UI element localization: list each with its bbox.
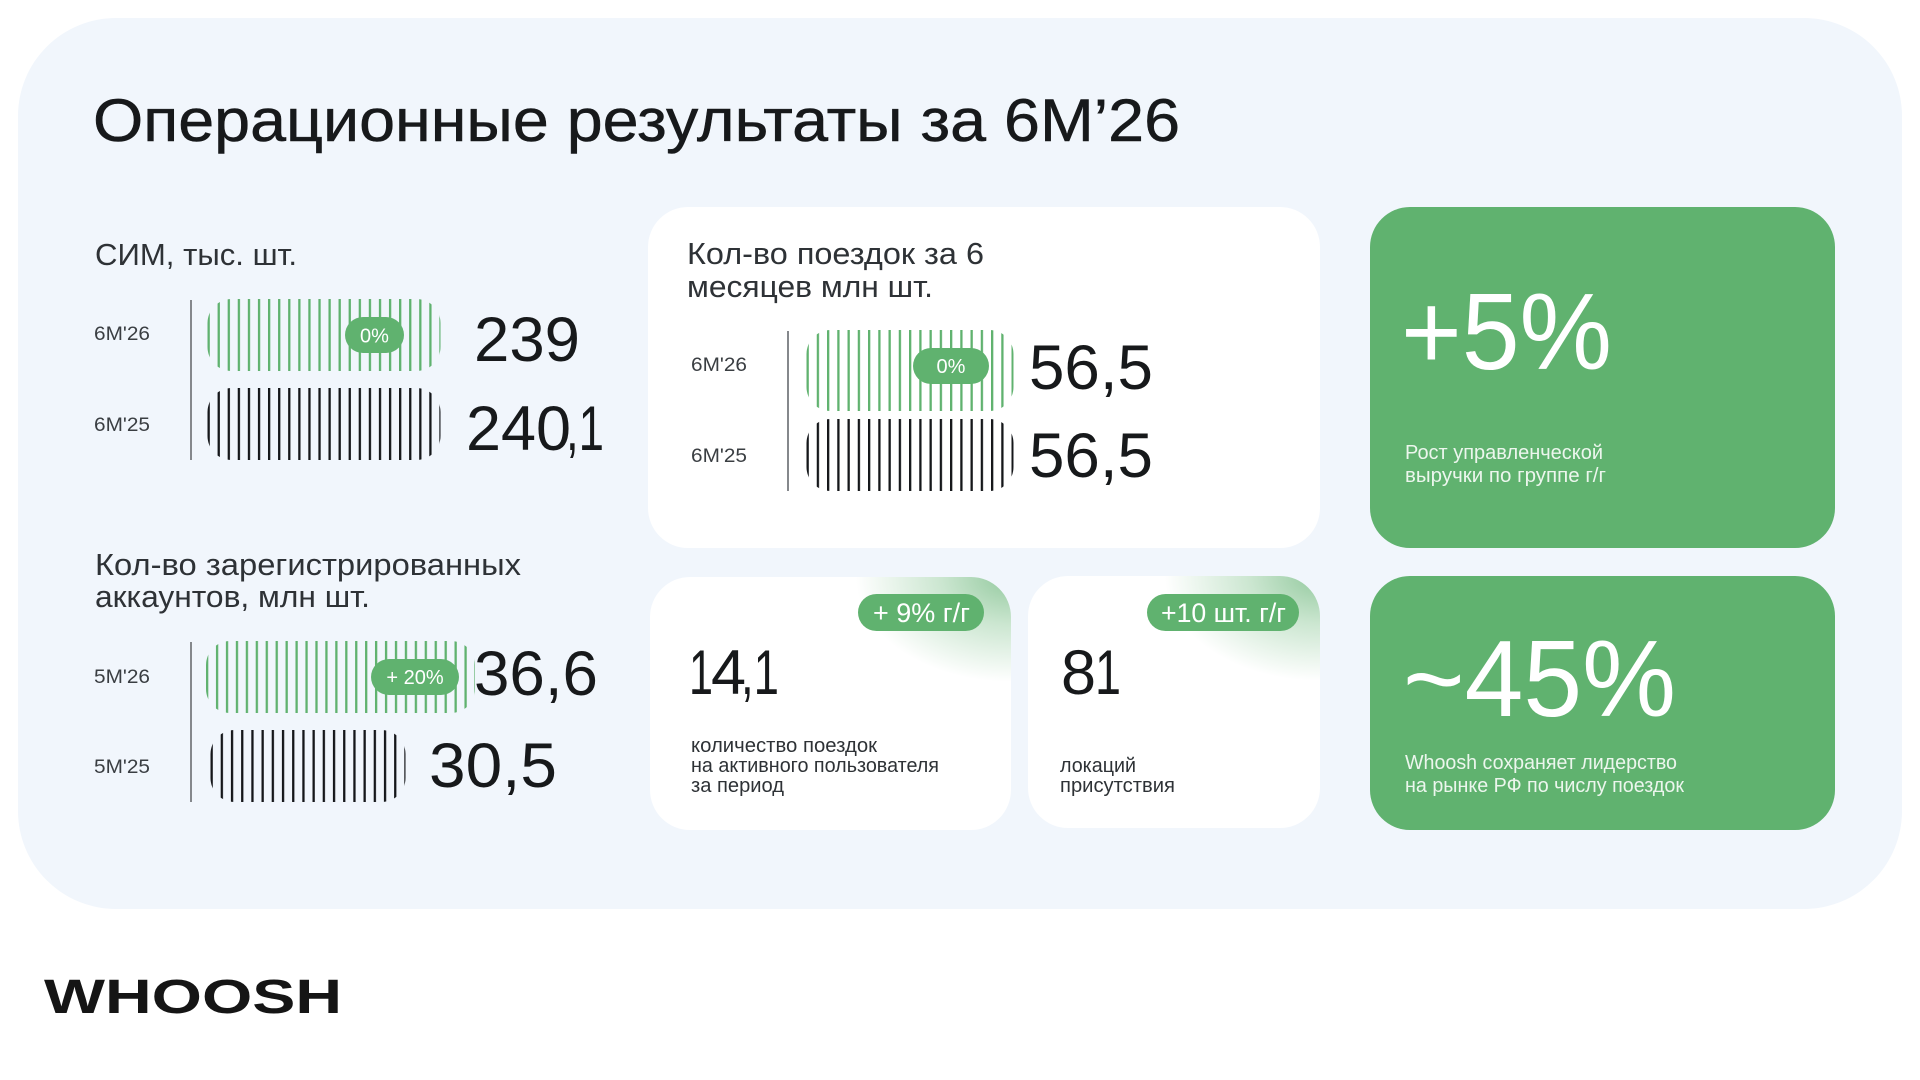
title: Операционные результаты за 6М’26 [93, 87, 1180, 154]
label: 5M'26: 5М'26 [94, 667, 150, 688]
card background [1370, 576, 1835, 830]
label: 6M'25: 6М'25 [691, 446, 747, 467]
value: 56,5 previous: 56,5 [1029, 421, 1153, 491]
badge: +10 units y/y [1147, 594, 1299, 631]
description [1060, 755, 1175, 797]
value: 14,1: 1 [689, 638, 713, 708]
value: 14,1: 4 [711, 638, 746, 708]
panel: SIM fleet [94, 237, 604, 464]
badge: 0% [345, 317, 404, 353]
badge: +9% y/y [858, 594, 984, 631]
logo: WHOOSH: WHOOSH [44, 971, 342, 1024]
description: выручки по группе г/г [1405, 465, 1606, 487]
card background [1028, 576, 1320, 828]
card background [1370, 207, 1835, 548]
panel: locations [1028, 576, 1320, 828]
value: 240,1: ,1 [566, 394, 604, 464]
label: 5M'25: 5М'25 [94, 757, 150, 778]
value: 14,1 [689, 638, 779, 708]
heading: registered accounts: Кол-во зарегистрированных [95, 547, 522, 582]
value: 240,1: 240 [466, 394, 571, 464]
bar: 6M'26 green [806, 330, 1014, 411]
badge: +9% y/y: + 9% г/г [873, 598, 970, 628]
chart axis [190, 300, 192, 460]
badge: +20% [371, 659, 459, 695]
description: количество поездок [691, 735, 877, 757]
badge: +10 units y/y: +10 шт. г/г [1161, 598, 1286, 628]
bar: 5M'25 black [210, 730, 406, 802]
value: 14,1: ,1 [741, 638, 779, 708]
description: Whoosh сохраняет лидерство [1405, 752, 1677, 774]
value: 36,6: 36,6 [474, 639, 598, 709]
panel: trips per active user [650, 577, 1011, 830]
bar: 5M'26 green [206, 641, 475, 713]
badge: 0%: 0% [937, 356, 966, 378]
description: на активного пользователя [691, 755, 939, 777]
value: 239: 239 [474, 305, 580, 375]
label: 6M'26: 6М'26 [94, 324, 150, 345]
badge: 0% [913, 348, 989, 384]
panel: market share [1370, 576, 1835, 830]
label: 6M'26: 6М'26 [691, 355, 747, 376]
badge: 0%: 0% [360, 326, 389, 348]
chart axis [787, 331, 789, 491]
description: присутствия [1060, 775, 1175, 797]
heading: SIM: СИМ, тыс. шт. [95, 237, 297, 272]
value: 81 [1061, 638, 1121, 708]
description [1405, 442, 1606, 487]
card background [648, 207, 1320, 548]
description: локаций [1060, 755, 1136, 777]
description: Рост управленческой [1405, 442, 1603, 464]
description [691, 735, 939, 797]
bar: 6M'25 black [806, 419, 1014, 491]
card background [650, 577, 1011, 830]
value: 56,5 current: 56,5 [1029, 333, 1153, 403]
panel: registered accounts [94, 547, 598, 802]
value: ~45%: ~45% [1403, 618, 1676, 740]
heading: trips: Кол-во поездок за 6 [687, 236, 984, 271]
chart axis [190, 642, 192, 802]
panel: trips card [648, 207, 1320, 548]
description [1405, 752, 1684, 797]
badge: +20%: + 20% [386, 667, 444, 689]
value: +5%: +5% [1401, 271, 1612, 393]
heading line 2: месяцев млн шт. [687, 269, 933, 304]
value: 81: 8 [1061, 638, 1096, 708]
value: 81: 1 [1095, 638, 1121, 708]
panel: revenue growth [1370, 207, 1835, 548]
description: на рынке РФ по числу поездок [1405, 775, 1684, 797]
description: за период [691, 775, 784, 797]
bar: 6M'26 green [208, 299, 440, 371]
value: 30,5: 30,5 [429, 731, 557, 801]
bar: 6M'25 black [208, 388, 440, 460]
heading line 2: аккаунтов, млн шт. [95, 579, 370, 614]
label: 6M'25: 6М'25 [94, 415, 150, 436]
